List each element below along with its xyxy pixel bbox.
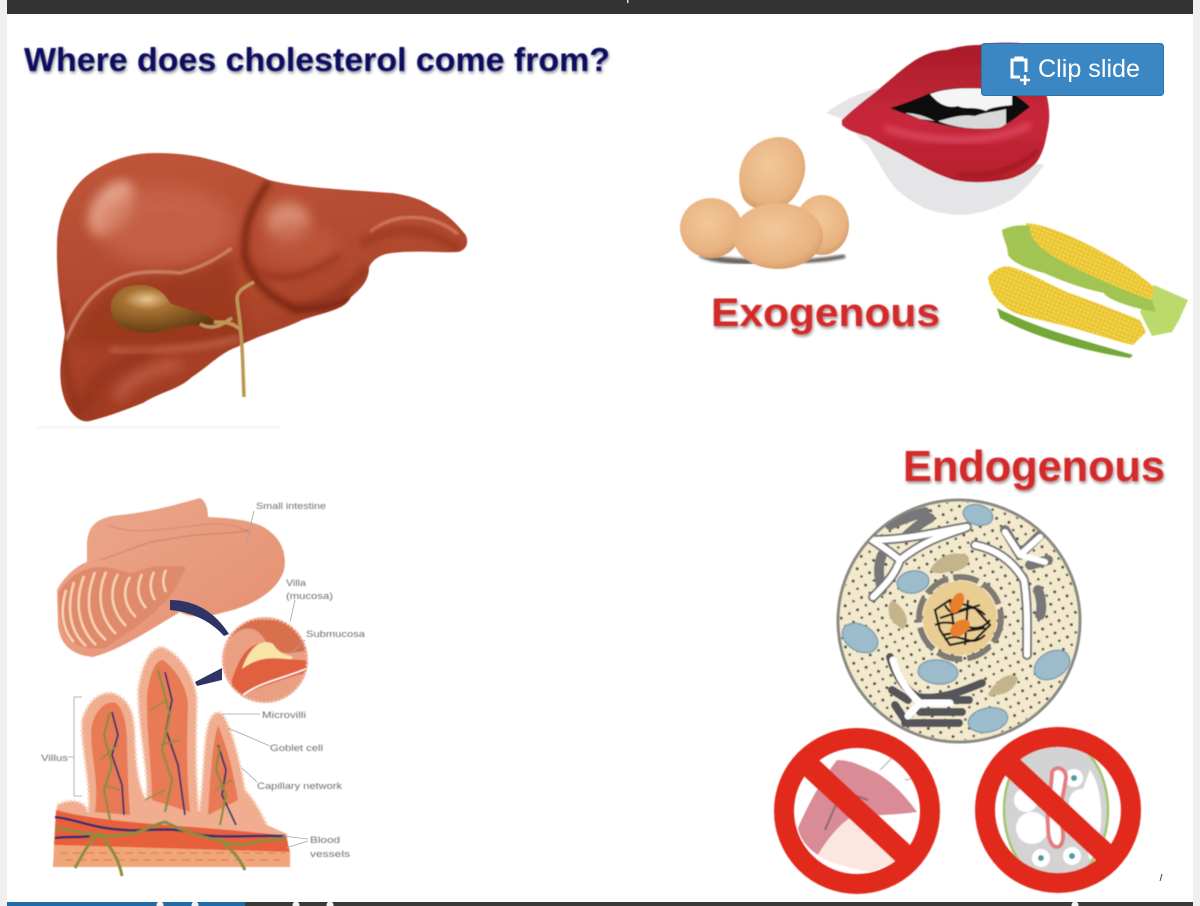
mouth shadow [826, 88, 1044, 215]
bile duct [200, 282, 254, 397]
title: Where does cholesterol come from? [24, 41, 610, 78]
liver lobe creases [245, 182, 351, 309]
intestine labels [41, 501, 366, 860]
endoplasmic reticulum [872, 512, 1048, 723]
blood vessels [55, 672, 285, 838]
upper cob [1026, 223, 1154, 305]
illustration: cell [837, 500, 1080, 742]
villi cross-section [53, 647, 290, 876]
lower lip highlight [885, 125, 1030, 140]
lower cob [988, 266, 1146, 345]
intestine labels: Villa [286, 578, 307, 589]
intestine labels: Submucosa [306, 629, 366, 640]
gallbladder [111, 285, 214, 333]
arrow: intestine to villi detail [170, 600, 229, 636]
intestine labels: Villus [41, 753, 68, 764]
intestine leader lines [68, 511, 308, 848]
submucosa detail circle [222, 617, 308, 703]
intestine labels: Small intestine [256, 501, 326, 512]
intestine tube [57, 498, 285, 657]
heading: exogenous: Exogenous [711, 291, 940, 335]
bottom toolbar [7, 902, 1193, 906]
corn leaves [1140, 285, 1188, 336]
mitochondria [837, 501, 1075, 736]
illustration: small intestine and villi [41, 498, 366, 876]
prohibited icon: liver tissue [784, 738, 930, 884]
intestine opening with folds [59, 566, 186, 648]
heading: endogenous: Endogenous [903, 442, 1165, 491]
arrow: detail to villus [195, 668, 222, 686]
mouth opening [890, 88, 1030, 129]
intestine labels: (mucosa) [286, 591, 333, 602]
liver base shadow [36, 426, 280, 429]
illustration: mouth [826, 43, 1049, 215]
teeth [905, 88, 1012, 129]
top toolbar [7, 0, 1193, 14]
liver lower cavity [66, 252, 245, 349]
intestine labels: Microvilli [262, 710, 306, 721]
lips [842, 43, 1049, 182]
intestine labels: Capillary network [257, 781, 342, 792]
intestine labels: vessels [310, 849, 350, 860]
tiny mark [1160, 874, 1162, 881]
button: clip slide [982, 44, 1164, 96]
illustration: eggs [680, 137, 849, 269]
golgi bodies [889, 554, 1018, 696]
intestine labels: Goblet cell [270, 743, 323, 754]
icon: clipboard [1012, 57, 1030, 85]
prohibited icon: intestinal crypt [985, 737, 1131, 883]
liver shading [60, 173, 460, 415]
button: clip slide: Clip slide [1038, 55, 1140, 83]
intestine labels: Blood [310, 835, 340, 846]
nucleus [919, 577, 1001, 659]
illustration: liver [36, 153, 467, 429]
illustration: corn [988, 223, 1188, 358]
